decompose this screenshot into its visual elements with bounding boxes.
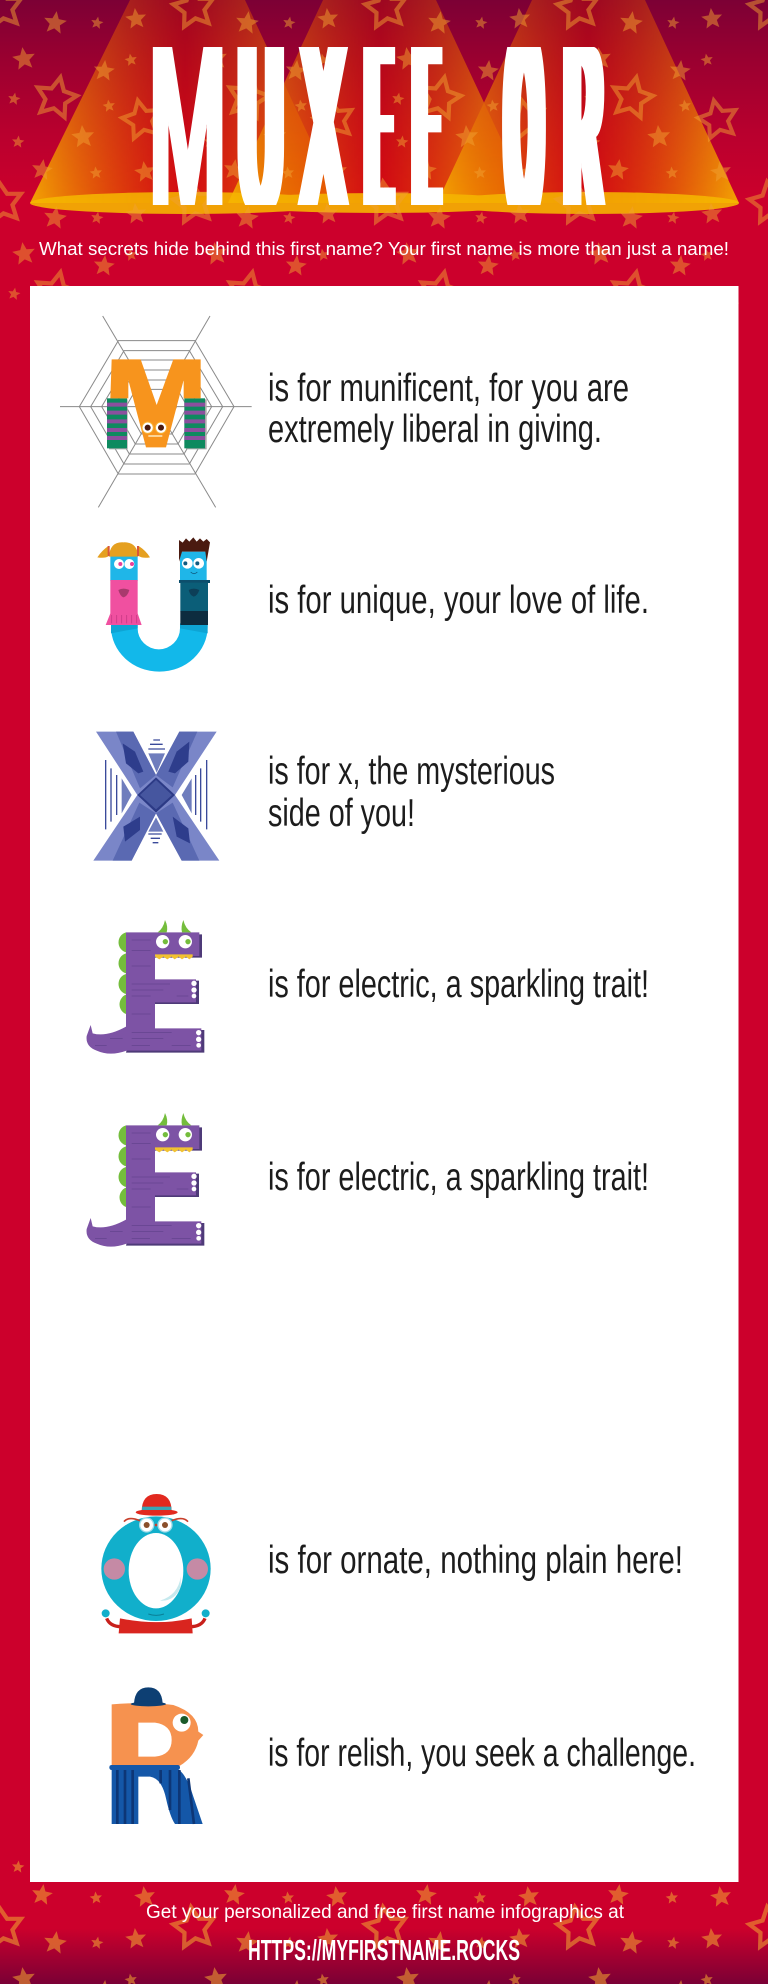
letter M body <box>110 359 201 447</box>
spotlight: middle cone <box>228 0 531 203</box>
eyes <box>142 422 167 437</box>
text: U line: is for unique, your love of life. <box>268 579 649 622</box>
icon: letter U two characters <box>97 537 210 672</box>
spotlight: left cone <box>30 0 340 203</box>
icon: second letter E dragon <box>87 1113 204 1247</box>
spotlights <box>30 0 739 214</box>
icon: letter M spider web monster <box>60 316 252 507</box>
title: E <box>415 0 438 254</box>
text: M line: is for munificent, for you are <box>268 367 629 410</box>
subtitle: What secrets hide behind this first name? Your first name is more than just a name! <box>39 239 729 259</box>
spotlight: right cone <box>437 0 739 203</box>
icon: letter X diamonds <box>93 732 219 861</box>
title: M <box>149 0 226 255</box>
right sock <box>184 398 207 449</box>
title: R <box>566 0 601 255</box>
title: E <box>367 0 390 254</box>
text: M line: extremely liberal in giving. <box>268 408 602 451</box>
title <box>152 47 606 205</box>
text: X lines <box>268 750 555 835</box>
left sock <box>107 398 128 449</box>
text: X lines: side of you! <box>268 792 415 835</box>
text: X lines: is for x, the mysterious <box>268 750 555 793</box>
icon: letter O character <box>101 1494 211 1633</box>
footer text: Get your personalized and free first name infographics at <box>146 1902 625 1923</box>
header star pattern <box>0 0 768 305</box>
panel: white letters panel <box>30 286 738 1882</box>
icon: letter E dragon <box>87 920 204 1054</box>
footer star pattern <box>0 1858 768 1984</box>
title: X <box>303 0 344 254</box>
text: M line <box>268 367 629 451</box>
icon: letter R character <box>109 1687 203 1824</box>
spotlight pools of light <box>30 192 739 214</box>
footer link: HTTPS://MYFIRSTNAME.ROCKS <box>248 1935 520 1967</box>
